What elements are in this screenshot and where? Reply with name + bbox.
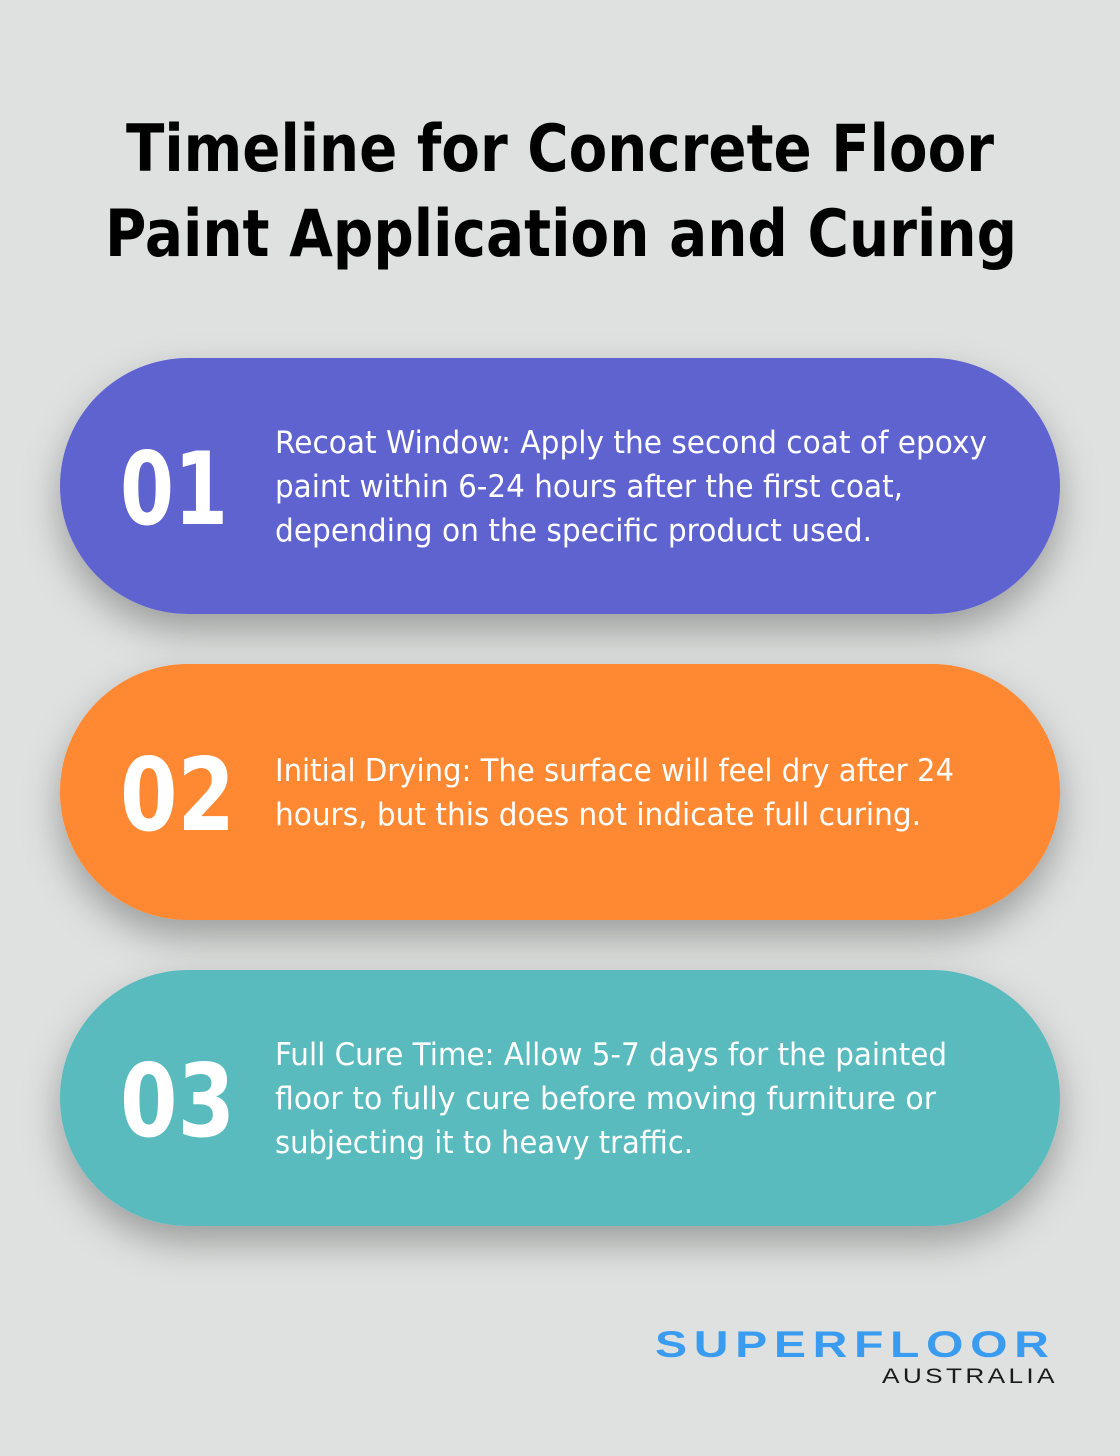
logo: Superfloor Australia: AUSTRALIA xyxy=(882,1364,1055,1388)
text: initial drying: Initial Drying: The surface will feel dry after 24 xyxy=(275,753,954,789)
text: full cure time: floor to fully cure before moving furniture or xyxy=(275,1081,936,1117)
text: full cure time xyxy=(275,1037,947,1161)
text: recoat window: Recoat Window: Apply the second coat of epoxy xyxy=(275,425,987,461)
number 01: 01 xyxy=(120,430,228,548)
teal pill xyxy=(60,970,1060,1226)
panel: step 02 initial drying xyxy=(60,664,1060,920)
text: recoat window: depending on the specific product used. xyxy=(275,513,872,549)
logo: Superfloor Australia: SUPERFLOOR xyxy=(655,1324,1049,1366)
text: initial drying: hours, but this does not indicate full curing. xyxy=(275,797,921,833)
title xyxy=(105,112,1017,272)
text: initial drying xyxy=(275,753,954,833)
orange pill xyxy=(60,664,1060,920)
number 03: 03 xyxy=(120,1042,235,1160)
purple pill xyxy=(60,358,1060,614)
text: recoat window xyxy=(275,425,987,549)
panel: step 03 full cure time xyxy=(60,970,1060,1226)
panel: step 01 recoat window xyxy=(60,358,1060,614)
logo: Superfloor Australia xyxy=(655,1324,1055,1388)
title: Timeline for Concrete Floor xyxy=(126,112,994,187)
text: full cure time: Full Cure Time: Allow 5-7 days for the painted xyxy=(275,1037,947,1073)
number 02: 02 xyxy=(120,736,235,854)
text: recoat window: paint within 6-24 hours after the first coat, xyxy=(275,469,903,505)
text: full cure time: subjecting it to heavy traffic. xyxy=(275,1125,693,1161)
